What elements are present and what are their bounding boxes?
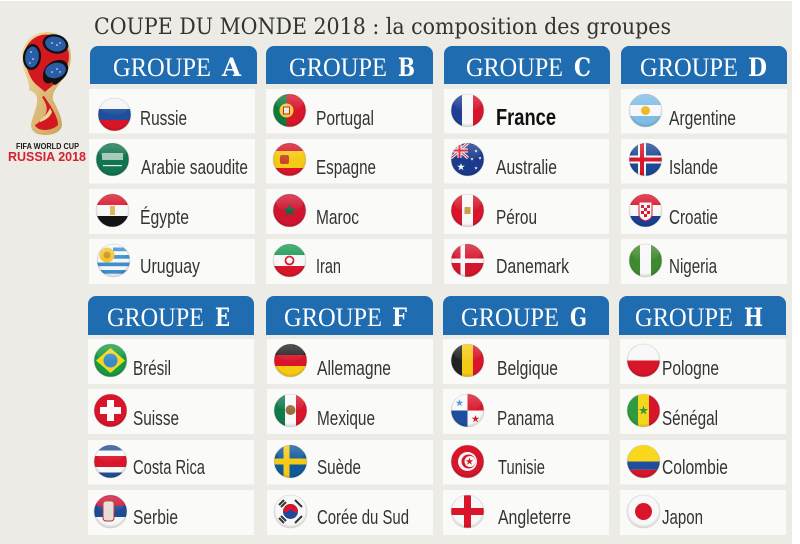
header E: GROUPE — [107, 302, 204, 332]
row: Suisse: Suisse — [133, 408, 179, 430]
row: Pologne — [620, 339, 786, 384]
header H — [619, 296, 786, 335]
header A: A — [221, 53, 242, 82]
panel: groupe D — [621, 46, 787, 284]
panel: groupe C — [444, 46, 610, 284]
row: Nigeria — [621, 239, 787, 284]
logo text: RUSSIA 2018: RUSSIA 2018 — [8, 150, 86, 164]
row: Sénégal: Sénégal — [662, 408, 718, 430]
title: COUPE DU MONDE 2018 : la composition des groupes — [94, 14, 671, 40]
row: Pérou: Pérou — [496, 207, 537, 229]
header C: GROUPE — [466, 52, 563, 82]
panel: groupe A — [89, 46, 257, 284]
row: Portugal: Portugal — [316, 108, 374, 130]
row: Colombie: Colombie — [662, 457, 728, 479]
row: Iran — [266, 239, 432, 284]
row: Belgique: Belgique — [497, 358, 558, 380]
row: Panama — [443, 389, 609, 434]
header D: D — [748, 53, 767, 82]
row: Serbie — [88, 490, 254, 535]
row: Pérou — [444, 189, 609, 234]
panel: groupe G — [443, 296, 609, 535]
row: Angleterre — [443, 490, 609, 535]
panel: groupe E — [88, 296, 254, 535]
row: Brésil: Brésil — [133, 358, 171, 380]
row: Espagne — [266, 139, 432, 184]
row: Maroc: Maroc — [316, 207, 359, 229]
row: Suède: Suède — [317, 457, 361, 479]
header G: G — [570, 303, 587, 332]
row: Arabie saoudite: Arabie saoudite — [141, 157, 248, 179]
panel: groupe H — [619, 296, 786, 535]
row: Belgique — [443, 339, 609, 384]
row: Égypte — [89, 189, 255, 234]
header G: GROUPE — [461, 302, 559, 332]
header E — [88, 296, 254, 335]
row: Argentine — [621, 89, 787, 134]
header B: GROUPE — [289, 52, 387, 82]
row: Mexique — [267, 389, 433, 434]
logo text: FIFA WORLD CUP: FIFA WORLD CUP — [16, 142, 80, 151]
row: France — [444, 89, 609, 134]
panel: groupe B — [266, 46, 433, 284]
header C: C — [574, 53, 591, 82]
row: France: France — [496, 104, 556, 130]
row: Maroc — [266, 189, 432, 234]
header B — [266, 46, 433, 84]
row: Tunisie: Tunisie — [498, 457, 545, 479]
row: Sénégal — [620, 389, 786, 434]
row: Croatie: Croatie — [669, 207, 718, 229]
row: Angleterre: Angleterre — [498, 507, 571, 529]
header H: GROUPE — [635, 302, 733, 332]
row: Corée du Sud — [267, 490, 433, 535]
row: Allemagne: Allemagne — [317, 358, 391, 380]
header F: GROUPE — [284, 302, 382, 332]
row: Australie: Australie — [496, 157, 557, 179]
ball 2 — [22, 43, 42, 71]
header A — [90, 46, 257, 84]
row: Iran: Iran — [316, 256, 341, 278]
row: Allemagne — [267, 339, 433, 384]
row: Suisse — [88, 389, 254, 434]
row: Uruguay — [89, 239, 255, 284]
logo: FIFA World Cup Russia 2018 — [8, 32, 86, 164]
row: Arabie saoudite — [89, 139, 255, 184]
row: Danemark: Danemark — [496, 256, 570, 278]
row: Japon: Japon — [662, 507, 703, 529]
row: Brésil — [88, 339, 254, 384]
row: Portugal — [266, 89, 432, 134]
header B: B — [398, 53, 415, 82]
row: Uruguay: Uruguay — [140, 256, 200, 278]
row: Panama: Panama — [497, 408, 555, 430]
header D — [621, 46, 787, 84]
row: Suède — [267, 440, 433, 484]
header A: GROUPE — [113, 52, 211, 82]
row: Nigeria: Nigeria — [669, 256, 718, 278]
row: Islande — [621, 139, 787, 184]
row: Croatie — [621, 189, 787, 234]
panel: groupe F — [266, 296, 433, 535]
row: Serbie: Serbie — [133, 507, 178, 529]
ball 1 — [41, 32, 70, 56]
row: Argentine: Argentine — [669, 108, 736, 130]
row: Australie — [444, 139, 609, 184]
row: Danemark — [444, 239, 609, 284]
row: Russie — [89, 89, 255, 134]
row: Costa Rica — [88, 440, 254, 484]
row: Mexique: Mexique — [317, 408, 375, 430]
header H: H — [744, 303, 763, 332]
header D: GROUPE — [640, 52, 738, 82]
header F — [266, 296, 433, 335]
row: Tunisie — [443, 440, 609, 484]
row: Colombie — [620, 440, 786, 484]
header C — [444, 46, 610, 84]
header F: F — [392, 303, 407, 332]
row: Russie: Russie — [140, 108, 187, 130]
icon: trophy — [22, 32, 71, 135]
row: Pologne: Pologne — [662, 358, 719, 380]
row: Japon — [620, 490, 786, 535]
row: Islande: Islande — [669, 157, 718, 179]
row: Espagne: Espagne — [316, 157, 376, 179]
row: Costa Rica: Costa Rica — [133, 457, 206, 479]
header E: E — [215, 303, 230, 332]
row: Corée du Sud: Corée du Sud — [317, 507, 409, 529]
header G — [443, 296, 609, 335]
ball 3 — [43, 60, 68, 85]
row: Égypte: Égypte — [140, 206, 189, 229]
